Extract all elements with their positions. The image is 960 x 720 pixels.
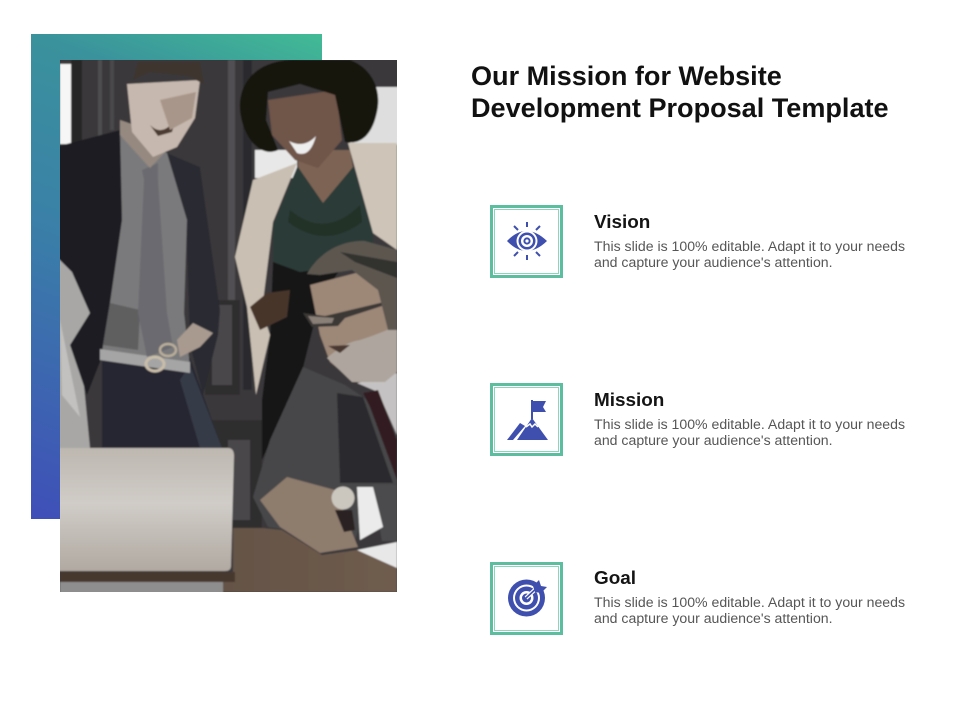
man face — [127, 80, 200, 157]
goal heading: Goal — [594, 568, 636, 589]
older man hands — [260, 477, 358, 553]
gradient accent panel behind photo — [31, 34, 322, 519]
woman top — [273, 165, 373, 272]
paper — [357, 542, 397, 568]
watch — [332, 486, 355, 532]
mission heading: Mission — [594, 390, 664, 411]
title: Development Proposal Template — [471, 92, 889, 123]
woman lower dress — [262, 262, 345, 460]
man tie — [138, 163, 173, 357]
vision text: This slide is 100% editable. Adapt it to your needs — [594, 238, 905, 254]
left person — [60, 258, 91, 449]
man hair — [133, 62, 204, 84]
man pants — [102, 358, 222, 448]
man belt — [100, 349, 190, 373]
man neck — [119, 119, 164, 168]
woman hand — [250, 290, 290, 330]
mission icon box — [490, 383, 563, 456]
laptop — [55, 448, 234, 571]
woman face — [268, 90, 342, 168]
older man lapel — [337, 393, 393, 483]
title — [471, 60, 889, 123]
woman neck — [298, 150, 353, 203]
older man hair — [307, 241, 397, 330]
photo: business team around a laptop — [60, 60, 397, 592]
mission text: This slide is 100% editable. Adapt it to your needs — [594, 416, 905, 432]
wall — [55, 55, 405, 600]
glasses in hand — [160, 344, 176, 356]
older man suit — [253, 367, 397, 540]
older man face — [309, 272, 388, 367]
older man glasses — [303, 302, 385, 327]
table — [222, 527, 397, 592]
goal text: and capture your audience's attention. — [594, 610, 833, 626]
older man collar — [357, 373, 397, 435]
goal text — [594, 594, 905, 626]
man hand — [177, 323, 213, 357]
icon: mountain flag — [507, 400, 548, 440]
goal text: This slide is 100% editable. Adapt it to your needs — [594, 594, 905, 610]
vision text — [594, 238, 905, 270]
mission text: and capture your audience's attention. — [594, 432, 833, 448]
vision heading: Vision — [594, 212, 650, 233]
older man sleeve — [373, 485, 397, 541]
woman hair — [240, 60, 378, 152]
man jacket left — [60, 130, 122, 394]
older man tie — [363, 390, 397, 480]
mission text — [594, 416, 905, 448]
older man cuff — [357, 487, 383, 540]
vision icon box — [490, 205, 563, 278]
man shirt — [102, 130, 190, 367]
icon: target — [508, 580, 547, 616]
goal icon box — [490, 562, 563, 635]
man jacket right — [167, 153, 220, 395]
woman blazer right — [348, 143, 397, 250]
vision text: and capture your audience's attention. — [594, 254, 833, 270]
icon: eye — [507, 222, 547, 260]
title: Our Mission for Website — [471, 60, 782, 91]
woman blazer left — [235, 163, 297, 395]
